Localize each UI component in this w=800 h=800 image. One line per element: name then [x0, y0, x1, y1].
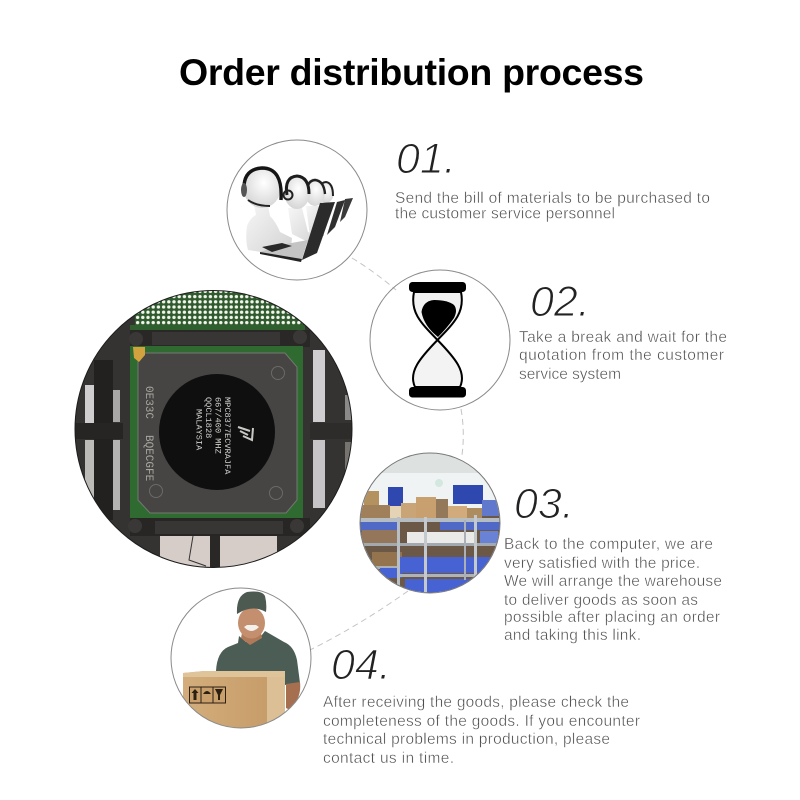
- title: Order distribution process: [179, 51, 644, 93]
- figure 1: [246, 205, 292, 256]
- back laptops: [340, 198, 353, 222]
- cap: [237, 592, 266, 614]
- shirt: [216, 631, 300, 685]
- box: [183, 671, 267, 728]
- step text: service system: [519, 366, 621, 383]
- dashed connector: step 2 to step 3: [461, 409, 463, 455]
- uprights: [397, 517, 400, 593]
- step text: very satisfied with the price.: [504, 555, 700, 572]
- top boxes: [364, 491, 379, 505]
- panel: step 3 warehouse: [358, 450, 722, 644]
- circle outline: [360, 453, 500, 593]
- step text: completeness of the goods. If you encounter: [323, 713, 640, 730]
- circle outline: [227, 140, 367, 280]
- panel: step 1 customer service: [227, 135, 710, 280]
- step text: and taking this link.: [504, 627, 641, 644]
- step text: Back to the computer, we are: [504, 536, 713, 553]
- photo: courier with box: [183, 592, 300, 729]
- chip package: [138, 353, 297, 513]
- step text: Send the bill of materials to be purchased to: [395, 190, 710, 207]
- chip markings: 0E33C: [142, 386, 154, 419]
- circle outline: [370, 270, 510, 410]
- circle outline: [171, 588, 311, 728]
- step text: [519, 329, 727, 383]
- green dotted board: [135, 290, 303, 326]
- step text: Take a break and wait for the: [519, 329, 727, 346]
- step text: [504, 536, 722, 644]
- step text: [395, 190, 710, 222]
- arm: [286, 682, 300, 710]
- dashed connector: step 1 to step 2: [352, 258, 396, 290]
- panel: step 4 delivery: [171, 588, 640, 767]
- shelf rows: [360, 518, 500, 522]
- figure 2: [288, 208, 310, 242]
- infographic: order distribution process: [74, 58, 726, 763]
- step text: We will arrange the warehouse: [504, 573, 722, 590]
- chip markings: [142, 386, 232, 482]
- figure 3: [306, 206, 324, 236]
- frame: [130, 330, 310, 347]
- front laptop: [302, 202, 335, 260]
- chip markings: 667/400 MHZ: [212, 397, 222, 454]
- curtains: [388, 487, 403, 506]
- photo: warehouse shelves: [358, 450, 502, 596]
- chip markings: BQECGFE: [142, 435, 154, 482]
- box handling icons: [190, 687, 226, 703]
- dashed connector: step 3 to step 4: [310, 591, 408, 650]
- step number: 04.: [331, 641, 391, 689]
- side windows: [85, 385, 94, 423]
- step text: contact us in time.: [323, 750, 454, 767]
- chip circle outline: [75, 290, 352, 568]
- step number: 03.: [514, 480, 574, 528]
- step text: quotation from the customer: [519, 347, 724, 364]
- icon: call-centre figures: [241, 166, 353, 262]
- black die circle: [159, 374, 275, 490]
- icon: hourglass: [409, 282, 466, 398]
- step text: to deliver goods as soon as: [504, 592, 698, 609]
- gold corner: [133, 347, 145, 362]
- panel: step 2 waiting: [370, 270, 727, 410]
- photo: circuit chip: [70, 285, 360, 575]
- step text: After receiving the goods, please check the: [323, 694, 629, 711]
- neck and face: [241, 634, 262, 645]
- step number: 01.: [396, 135, 456, 183]
- chip markings: MALAYSIA: [194, 409, 204, 451]
- paper below chip: [160, 536, 277, 567]
- step text: [323, 694, 640, 767]
- figure 4: [322, 181, 334, 203]
- step text: technical problems in production, please: [323, 731, 610, 748]
- step text: the customer service personnel: [395, 206, 615, 222]
- step text: possible after placing an order: [504, 609, 720, 626]
- chip markings: QQCL1828: [203, 397, 213, 438]
- chip markings: MPC8377ECVRAJFA: [222, 397, 232, 475]
- step number: 02.: [530, 278, 590, 326]
- green substrate: [130, 346, 303, 518]
